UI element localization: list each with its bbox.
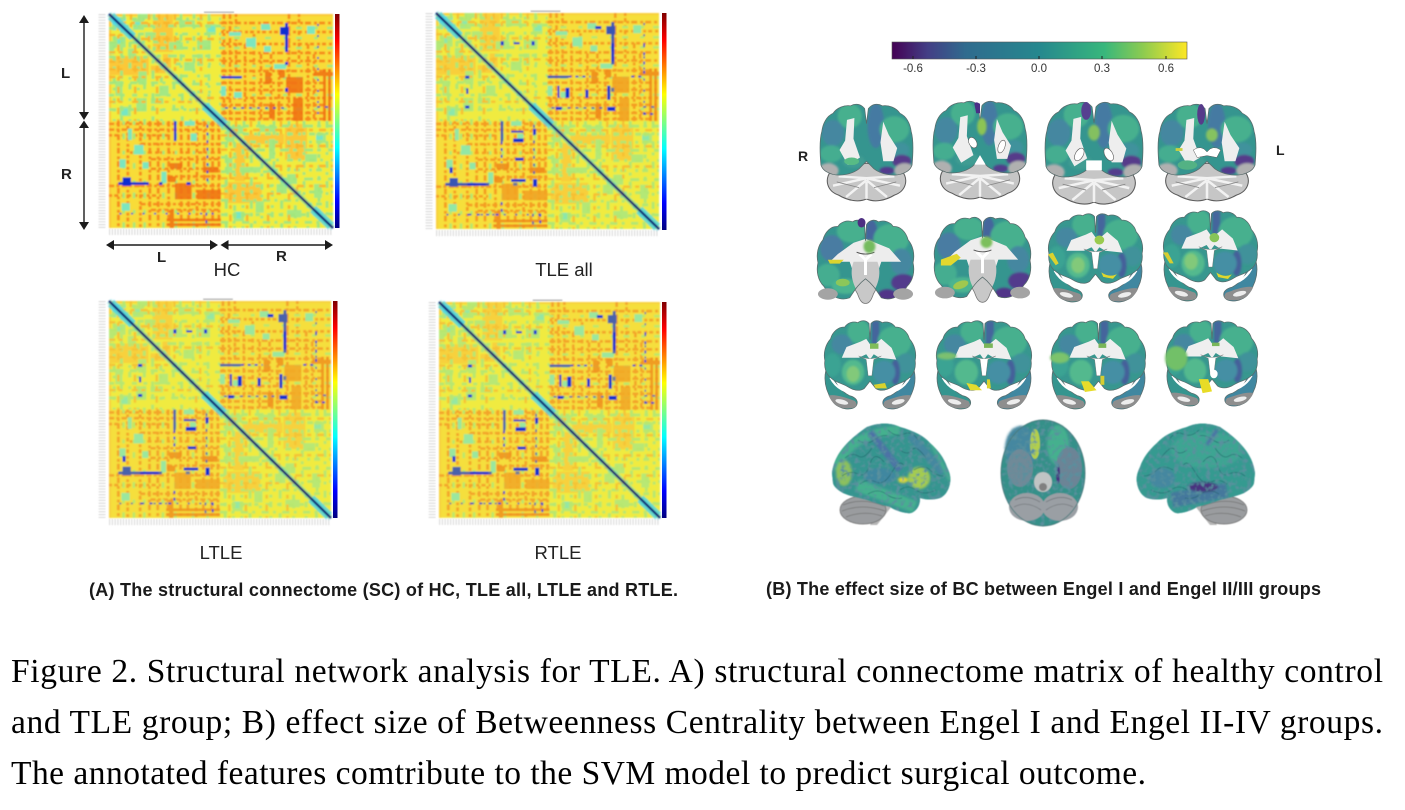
coronal slice 3 <box>1043 101 1145 204</box>
3D brain: left lateral view <box>1132 420 1262 525</box>
label: HC: HC <box>214 259 240 280</box>
matrix: LTLE <box>102 298 338 522</box>
label: L hemisphere side: L <box>1276 142 1285 158</box>
axis label: R horizontal: R <box>276 248 287 265</box>
figure caption: Figure 2. Structural network analysis for TLE. A) structural connectome matrix of healthy control <box>11 653 1383 690</box>
label: RTLE: RTLE <box>535 542 581 563</box>
matrix: TLE all <box>429 10 666 233</box>
colorbar: viridis effect size: -0.3 <box>966 63 986 75</box>
3D brain: inferior view <box>1001 420 1085 526</box>
coronal slice 11 <box>1050 320 1147 409</box>
coronal slice 7 <box>1047 213 1144 302</box>
panel B: effect size brain maps <box>798 42 1285 526</box>
coronal slice 2 <box>931 100 1029 199</box>
axis label: L horizontal: L <box>157 249 166 266</box>
coronal slice 6 <box>933 215 1032 302</box>
coronal slice 5 <box>816 218 915 304</box>
coronal slice 1 <box>818 103 915 201</box>
colorbar: viridis effect size: -0.6 <box>903 63 923 75</box>
colorbar: viridis effect size: 0.6 <box>1158 63 1174 75</box>
axis label: R vertical: R <box>61 166 72 183</box>
3D brain: right lateral view <box>825 420 955 525</box>
coronal slice 12 <box>1165 320 1259 406</box>
colorbar: viridis effect size: 0.0 <box>1031 63 1047 75</box>
panel A: structural connectome matrices <box>61 10 666 563</box>
label: R hemisphere side: R <box>798 148 808 164</box>
label: LTLE: LTLE <box>200 542 242 563</box>
panel A caption: (A) The structural connectome (SC) of HC, TLE all, LTLE and RTLE. <box>89 580 678 600</box>
axis label: L vertical: L <box>61 65 70 82</box>
label: TLE all: TLE all <box>535 259 593 280</box>
figure caption: The annotated features comtribute to the SVM model to predict surgical outcome. <box>11 755 1146 792</box>
matrix: HC <box>102 12 340 232</box>
coronal slice 10 <box>935 320 1033 409</box>
panel B caption: (B) The effect size of BC between Engel I and Engel II/III groups <box>766 579 1321 599</box>
figure caption: and TLE group; B) effect size of Betweenness Centrality between Engel I and Engel II-IV groups. <box>11 704 1383 741</box>
axis arrows: HC left and right hemispheres <box>79 15 333 250</box>
colorbar: viridis effect size: 0.3 <box>1094 63 1110 75</box>
figure caption <box>11 653 1383 792</box>
coronal slice 8 <box>1162 210 1259 301</box>
matrix: RTLE <box>432 299 666 522</box>
coronal slice 4 <box>1156 103 1258 201</box>
colorbar: viridis effect size <box>892 42 1187 75</box>
coronal slice 9 <box>823 320 917 409</box>
